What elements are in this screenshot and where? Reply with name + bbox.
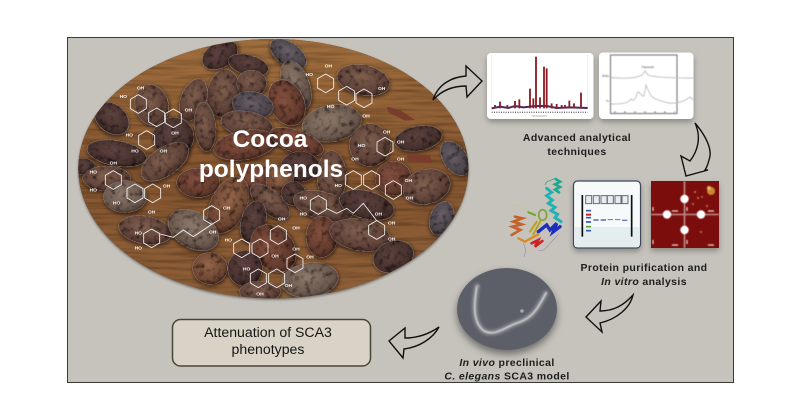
molecule: top right flavanol: HO (306, 72, 313, 78)
label: In vivo preclinical C. elegans SCA3 model: C. elegans SCA3 model (444, 370, 570, 382)
chart: spectra card: SPSN (602, 75, 609, 78)
molecule: left flavanol (90, 160, 171, 216)
chart: spectra card: Flavanols (642, 65, 655, 69)
molecule: upper left glycoside: HO (126, 132, 133, 138)
molecule: upper left glycoside: OH (185, 107, 192, 113)
molecule: top right flavanol (306, 64, 386, 119)
label: Advanced analytical techniques: Advanced analytical (523, 132, 631, 144)
molecule: upper left glycoside: HO (120, 94, 127, 100)
molecule: lower left caffeoyl: OH (223, 206, 231, 212)
molecule: upper left glycoside: OH (137, 85, 145, 91)
molecule: bottom procyanidin: OH (292, 225, 300, 231)
molecule: lower left caffeoyl (135, 206, 231, 252)
photo: cocoa beans oval (72, 33, 476, 303)
molecule: left flavanol: HO (90, 170, 97, 176)
molecule: right glycoside: OH (397, 140, 405, 146)
arrow: protein to worm (586, 295, 633, 332)
molecule: upper left glycoside: OH (171, 131, 179, 137)
molecule: right glycoside: HO (335, 183, 342, 189)
arrow: photo to analytics (433, 66, 482, 100)
molecule: lower left caffeoyl: HO (135, 230, 142, 236)
molecule: upper left glycoside: OH (160, 149, 167, 155)
molecule: top right flavanol: OH (325, 64, 332, 70)
molecule: right glycoside: OH (405, 178, 412, 184)
label: In vivo preclinical C. elegans SCA3 model: In vivo preclinical (459, 357, 555, 369)
molecule: left flavanol: HO (113, 200, 121, 206)
image: C. elegans disc (457, 268, 557, 350)
arrow: analytics to protein (681, 123, 710, 176)
molecule: bottom procyanidin: OH (271, 254, 279, 260)
molecule: right glycoside: HO (358, 143, 366, 149)
molecule: top right flavanol: OH (362, 113, 370, 119)
label: Protein purification and In vitro analysis: In vitro analysis (601, 276, 687, 288)
molecule: bottom procyanidin: OH (278, 216, 286, 222)
molecule: lower left caffeoyl: HO (135, 246, 142, 252)
molecule: right glycoside: OH (383, 130, 391, 136)
molecule: lower right caffeoyl: OH (375, 211, 382, 217)
molecule: lower right caffeoyl (300, 196, 396, 242)
chart: spectra card (599, 52, 694, 119)
panel: background (68, 38, 734, 382)
molecule: left flavanol: OH (148, 210, 156, 216)
callout: Attenuation of SCA3 phenotypes: Attenuation of SCA3 (204, 324, 332, 340)
image: AFM micrographs (651, 181, 719, 248)
molecule: right glycoside: OH (406, 196, 413, 202)
callout: Attenuation of SCA3 phenotypes (172, 320, 370, 366)
label: Protein purification and In vitro analysis: Protein purification and (581, 262, 707, 274)
molecule: lower left caffeoyl: OH (209, 230, 217, 236)
molecule: left flavanol: HO (90, 187, 97, 193)
molecule: bottom procyanidin: HO (225, 237, 232, 243)
molecule: top right flavanol: HO (327, 104, 335, 110)
molecule: right glycoside: OH (397, 156, 405, 162)
molecule: bottom procyanidin: OH (285, 283, 292, 289)
icon: gel electrophoresis card (574, 181, 640, 248)
molecule: upper left glycoside: HO (131, 149, 139, 155)
heading: Cocoa polyphenols: Cocoa (233, 126, 308, 153)
chart: spectra card: Tu (606, 100, 609, 103)
molecule: bottom procyanidin: OH (256, 291, 264, 297)
molecule: bottom procyanidin: OH (306, 255, 314, 261)
molecule: right glycoside: OH (351, 156, 359, 162)
molecule: right glycoside (335, 130, 413, 202)
molecule: bottom procyanidin (225, 216, 314, 297)
chart: chromatogram card (487, 53, 594, 119)
molecule: lower right caffeoyl: HO (300, 196, 307, 202)
molecule: bottom procyanidin: HO (243, 266, 251, 272)
label: Advanced analytical techniques: techniques (547, 146, 607, 158)
callout: Attenuation of SCA3 phenotypes: phenotypes (232, 341, 304, 357)
molecule: left flavanol: OH (110, 160, 117, 166)
molecule: lower right caffeoyl: OH (388, 220, 396, 226)
arrow: worm to outcome (389, 327, 439, 358)
heading: Cocoa polyphenols: polyphenols (199, 156, 343, 183)
molecule: upper left glycoside (120, 85, 192, 155)
molecule: lower right caffeoyl: OH (388, 236, 396, 242)
molecule: lower right caffeoyl: HO (300, 211, 307, 217)
molecule: top right flavanol: OH (378, 86, 386, 92)
icon: protein ribbon (512, 178, 561, 257)
molecule: bottom procyanidin: OH (292, 246, 300, 252)
molecule: left flavanol: OH (163, 184, 171, 190)
